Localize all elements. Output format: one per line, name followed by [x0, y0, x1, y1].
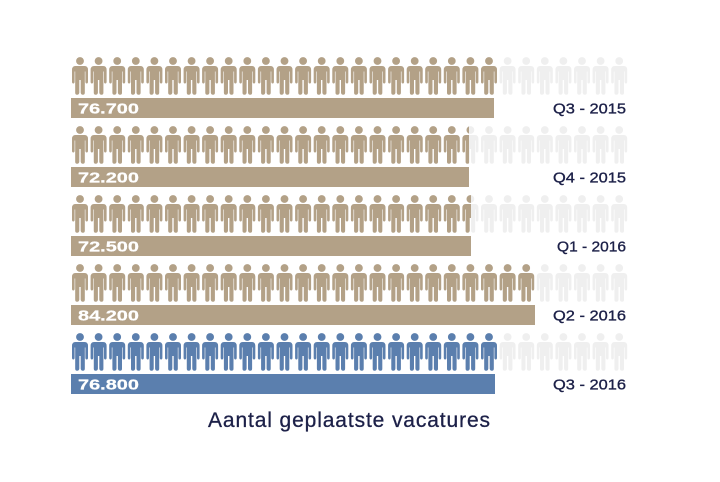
- people: Q3 2016: [72, 333, 627, 371]
- bar: Q3 2016 76.800: [71, 374, 495, 394]
- label: Q3 - 2015: Q3 - 2015: [553, 100, 626, 118]
- row: Q1 - 2016: [71, 195, 627, 256]
- bar: Q1 2016 72.500: [71, 236, 471, 256]
- value: 72.500: 72.500: [78, 238, 139, 256]
- value: 84.200: 84.200: [78, 308, 139, 324]
- bar: Q2 2016 84.200: [71, 305, 535, 325]
- label: Q1 - 2016: Q1 - 2016: [557, 238, 626, 256]
- bar: Q3 2015 76.700: [71, 98, 494, 118]
- people: Q3 2015: [72, 57, 627, 95]
- label: Q2 - 2016: Q2 - 2016: [553, 308, 626, 324]
- title: Aantal geplaatste vacatures: [208, 409, 490, 432]
- bar: Q4 2015 72.200: [71, 167, 469, 187]
- people: Q2 2016: [72, 264, 627, 302]
- row: Q2 - 2016: [71, 264, 627, 325]
- value: 76.700: 76.700: [78, 100, 139, 118]
- row: Q4 - 2015: [71, 126, 627, 187]
- infographic: aantal geplaatste vacatures: [71, 57, 627, 432]
- row: Q3 - 2016: [71, 333, 627, 394]
- people: Q1 2016: [72, 195, 627, 233]
- label: Q3 - 2016: Q3 - 2016: [553, 376, 626, 394]
- value: 76.800: 76.800: [78, 376, 139, 394]
- people: Q4 2015: [72, 126, 627, 164]
- row: Q3 - 2015: [71, 57, 627, 118]
- label: Q4 - 2015: Q4 - 2015: [553, 170, 626, 186]
- value: 72.200: 72.200: [78, 170, 139, 186]
